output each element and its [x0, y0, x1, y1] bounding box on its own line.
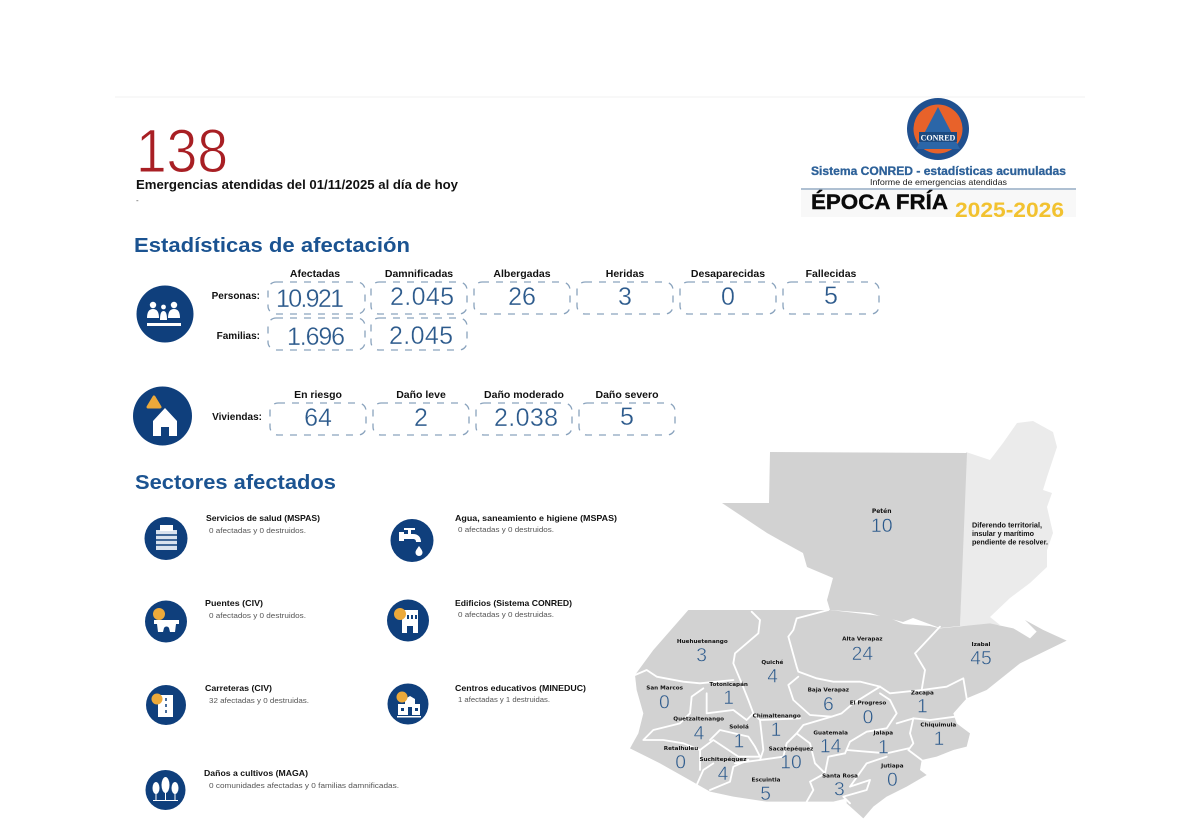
department labels and values: 1: [934, 729, 944, 750]
sector: centros educativos: 1 afectadas y 1 destruidas.: [458, 695, 550, 704]
sector: edificios: [387, 598, 572, 642]
department labels and values: Sacatepéquez: [769, 745, 814, 752]
sector: edificios: 0 afectadas y 0 destruidas.: [458, 610, 554, 619]
panel: personas y familias: 2.045: [390, 283, 454, 311]
dispute note: Diferendo territorial,: [972, 522, 1042, 530]
panel: viviendas: [212, 389, 675, 435]
department labels and values: 4: [767, 667, 778, 688]
department labels and values: 1: [723, 688, 734, 709]
panel: personas y familias: 2.045: [389, 322, 453, 350]
icon: building: [387, 600, 429, 642]
sector: cultivos: Daños a cultivos (MAGA): [204, 768, 308, 778]
department labels and values: 3: [834, 780, 845, 801]
panel: personas y familias: Familias:: [217, 331, 260, 342]
map region: Petén: Petén: [872, 508, 892, 515]
row labels: Personas:: [212, 291, 260, 302]
logo subtitle: Informe de emergencias atendidas: [870, 177, 1007, 187]
panel: viviendas: 2: [414, 404, 428, 432]
sector: salud: 0 afectadas y 0 destruidos.: [209, 526, 306, 535]
department labels and values: 0: [659, 692, 670, 713]
sector: agua: [390, 513, 617, 562]
values: 64: [304, 404, 332, 432]
department labels and values: Jutiapa: [880, 764, 904, 770]
dispute note: [972, 522, 1048, 546]
icon: house with warning: [133, 386, 192, 446]
map region: Belize dispute: [960, 421, 1057, 626]
heading: sectores afectados: Sectores afectados: [135, 471, 336, 494]
sector: edificios: Edificios (Sistema CONRED): [455, 598, 572, 608]
icon: hospital: [144, 517, 188, 560]
column headers: Afectadas: [290, 268, 340, 280]
department labels and values: 24: [852, 644, 873, 665]
sector: carreteras: 32 afectadas y 0 destruidas.: [209, 696, 309, 705]
icon: bridge: [145, 600, 187, 642]
value boxes: [270, 403, 366, 435]
department labels and values: San Marcos: [646, 685, 684, 691]
logo title: Sistema CONRED - estadísticas acumuladas: [811, 164, 1066, 178]
department labels and values: Alta Verapaz: [842, 637, 883, 643]
icon: CONRED seal: [907, 98, 969, 160]
icon: crops: [146, 770, 186, 810]
department labels and values: Sololá: [729, 724, 749, 731]
department labels and values: 4: [694, 723, 705, 744]
department labels and values: 1: [878, 737, 889, 758]
sector: carreteras: Carreteras (CIV): [205, 683, 272, 693]
icon: people: [136, 286, 194, 342]
department labels and values: 0: [887, 770, 898, 791]
department labels and values: El Progreso: [850, 700, 886, 706]
department labels and values: 0: [675, 752, 686, 773]
department borders: [635, 610, 967, 803]
sector: puentes: 0 afectados y 0 destruidos.: [209, 611, 306, 620]
sector: agua: Agua, saneamiento e higiene (MSPAS): [455, 513, 617, 523]
icon: tap: [390, 519, 434, 562]
department labels and values: 4: [718, 764, 729, 785]
value boxes row 2: [268, 318, 365, 350]
department labels and values: Suchitepéquez: [699, 756, 747, 763]
icon: school: [388, 684, 428, 724]
department labels and values: Chiquimula: [920, 723, 956, 729]
panel: personas y familias: Fallecidas: [806, 268, 857, 280]
season years: 2025-2026: [955, 199, 1064, 222]
department labels and values: Quetzaltenango: [673, 717, 724, 723]
sector: puentes: Puentes (CIV): [205, 598, 263, 608]
icon: road: [146, 685, 186, 725]
department labels and values: Totonicapán: [709, 681, 748, 688]
map region: Petén: [722, 452, 967, 628]
sector: salud: [144, 513, 320, 560]
sector: puentes: [145, 598, 306, 642]
panel: personas y familias: Albergadas: [493, 268, 551, 280]
values: 10.921: [276, 285, 344, 313]
department labels and values: 5: [760, 784, 771, 805]
department labels and values: Santa Rosa: [822, 774, 858, 780]
dispute note: pendiente de resolver.: [972, 540, 1048, 546]
headline: emergencies total: [136, 117, 458, 192]
sector: carreteras: [146, 683, 309, 725]
department labels and values: 0: [863, 707, 873, 728]
heading: estadísticas de afectación: Estadísticas de afectación: [134, 234, 410, 257]
department labels and values: 10: [780, 752, 802, 773]
row label: Viviendas:: [212, 412, 262, 423]
sector: cultivos: 0 comunidades afectadas y 0 familias damnificadas.: [209, 781, 399, 790]
department labels and values: Guatemala: [813, 730, 848, 736]
department labels and values: Jalapa: [873, 731, 893, 737]
logo block: CONRED header: [801, 98, 1076, 222]
department labels and values: 1: [917, 697, 928, 718]
department labels and values: Chimaltenango: [753, 714, 801, 720]
department labels and values: [646, 637, 992, 805]
panel: personas y familias: 26: [508, 283, 536, 311]
panel: personas y familias: Heridas: [606, 268, 644, 280]
big number 138: 138: [136, 117, 228, 185]
department labels and values: Retalhuleu: [664, 746, 698, 752]
department labels and values: Zacapa: [911, 690, 934, 696]
panel: viviendas: 5: [620, 403, 634, 431]
panel: viviendas: Daño severo: [595, 389, 659, 401]
department labels and values: 1: [771, 720, 781, 741]
department labels and values: Escuintla: [751, 777, 781, 783]
department labels and values: Huehuetenango: [677, 639, 728, 645]
department labels and values: Quiché: [761, 659, 783, 666]
map regions: southern departments: [630, 610, 1067, 818]
department labels and values: 3: [696, 646, 707, 667]
headline caption: Emergencias atendidas del 01/11/2025 al día de hoy: [136, 178, 458, 192]
department labels and values: Izabal: [971, 642, 991, 648]
map of Guatemala: [630, 421, 1067, 818]
icon: CONRED seal: CONRED: [921, 134, 956, 142]
sector: cultivos: [146, 768, 399, 810]
text: -: [136, 196, 139, 205]
column headers: En riesgo: [294, 389, 342, 401]
panel: personas y familias: Desaparecidas: [691, 268, 765, 280]
department labels and values: 1: [734, 732, 744, 753]
dispute note: insular y marítimo: [972, 531, 1034, 538]
department labels and values: 45: [970, 648, 992, 669]
sector: agua: 0 afectadas y 0 destruidos.: [458, 525, 554, 534]
panel: personas y familias: 3: [618, 283, 632, 311]
panel: viviendas: Daño moderado: [484, 389, 564, 401]
department labels and values: Baja Verapaz: [808, 687, 850, 693]
map region: Petén: 10: [871, 515, 893, 537]
season label: ÉPOCA FRÍA: [811, 191, 948, 214]
value boxes row 1: [268, 282, 365, 314]
panel: viviendas: Daño leve: [396, 389, 446, 401]
sector: salud: Servicios de salud (MSPAS): [206, 513, 320, 523]
department labels and values: 14: [820, 737, 842, 758]
panel: viviendas: 2.038: [494, 404, 558, 432]
panel: personas y familias: [212, 268, 879, 351]
panel: personas y familias: Damnificadas: [385, 268, 453, 280]
sector: centros educativos: Centros educativos (MINEDUC): [455, 683, 586, 693]
panel: personas y familias: 1.696: [287, 323, 345, 351]
department labels and values: 6: [823, 694, 834, 715]
panel: personas y familias: 5: [824, 282, 838, 310]
sector: centros educativos: [388, 683, 586, 724]
panel: personas y familias: 0: [721, 283, 735, 311]
